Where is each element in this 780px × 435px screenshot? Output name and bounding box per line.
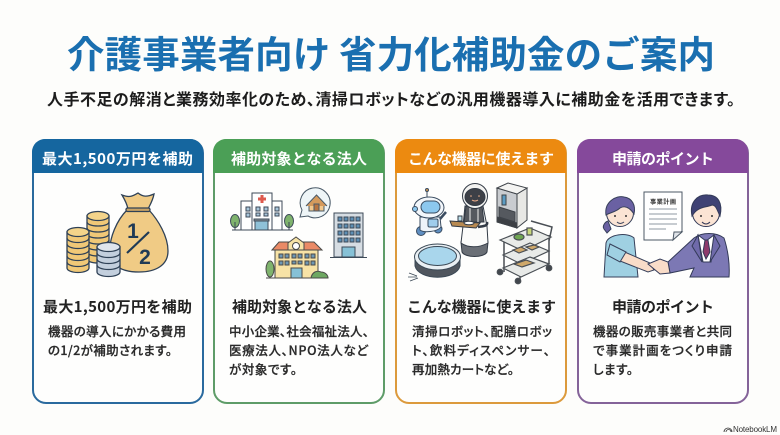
- card heading: subsidy amount: 最大1,500万円を補助: [43, 296, 192, 317]
- icon text: one half: 1: [127, 220, 139, 243]
- icon: small blue robot: [412, 188, 446, 236]
- card body: eligible corporations: が対象です。: [229, 359, 297, 378]
- icon: hospital: [230, 193, 294, 230]
- icon: serving robot: [450, 184, 488, 256]
- card body: eligible corporations: 医療法人、NPO法人など: [229, 340, 369, 359]
- icon: coins and money bag: [67, 193, 168, 276]
- icon: house speech bubble: [300, 188, 330, 218]
- panel: eligible corporations: [213, 139, 384, 403]
- panel: application point: [577, 139, 748, 403]
- header band: eligible corporations: 補助対象となる法人: [231, 148, 367, 169]
- card body: subsidy amount: [48, 321, 186, 359]
- card heading: application point: 申請のポイント: [612, 296, 714, 317]
- icon: robot vacuum: [408, 244, 460, 281]
- card body: application point: で事業計画をつくり申請: [593, 340, 732, 359]
- header band: application point: 申請のポイント: [612, 148, 714, 169]
- card body: equipment: ト、飲料ディスペンサー、: [412, 340, 550, 359]
- card body: application point: 機器の販売事業者と共同: [593, 321, 732, 340]
- card body: equipment: 再加熱カートなど。: [412, 359, 514, 378]
- card heading: equipment: こんな機器に使えます: [407, 296, 556, 317]
- card body: subsidy amount: 機器の導入にかかる費用: [48, 321, 186, 340]
- card body: application point: します。: [593, 359, 633, 378]
- icon: beverage dispenser: [497, 183, 527, 228]
- header band: eligible corporations: [213, 139, 384, 173]
- NotebookLM watermark: NotebookLM: [733, 425, 777, 434]
- icon text: one half: 2: [139, 246, 151, 269]
- icon: man in suit: [648, 195, 729, 277]
- panel: equipment: [395, 139, 566, 403]
- card body: subsidy amount: の1/2が補助されます。: [48, 340, 172, 359]
- header band: subsidy amount: 最大1,500万円を補助: [42, 148, 193, 169]
- icon text: one half: [127, 220, 151, 269]
- card heading: eligible corporations: 補助対象となる法人: [232, 296, 367, 317]
- icon: school: [266, 237, 328, 278]
- icon: reheating cart: [497, 221, 552, 284]
- header band: equipment: こんな機器に使えます: [408, 148, 554, 169]
- icon: business plan document: 事業計画: [650, 197, 676, 206]
- icon: woman in blue uniform: [603, 197, 654, 277]
- subtitle: 人手不足の解消と業務効率化のため、清掃ロボットなどの汎用機器導入に補助金を活用できます。: [47, 86, 735, 110]
- header band: subsidy amount: [32, 139, 203, 173]
- card body: eligible corporations: [229, 321, 369, 378]
- icon: business plan document: [644, 192, 682, 240]
- card body: application point: [593, 321, 732, 378]
- title: 介護事業者向け 省力化補助金のご案内: [67, 24, 715, 79]
- header band: application point: [577, 139, 748, 173]
- header band: equipment: [395, 139, 566, 173]
- card body: equipment: [412, 321, 552, 378]
- card body: equipment: 清掃ロボット、配膳ロボッ: [412, 321, 552, 340]
- icon: office building: [330, 213, 367, 258]
- panel: subsidy amount: [32, 139, 203, 403]
- card body: eligible corporations: 中小企業、社会福祉法人、: [229, 321, 369, 340]
